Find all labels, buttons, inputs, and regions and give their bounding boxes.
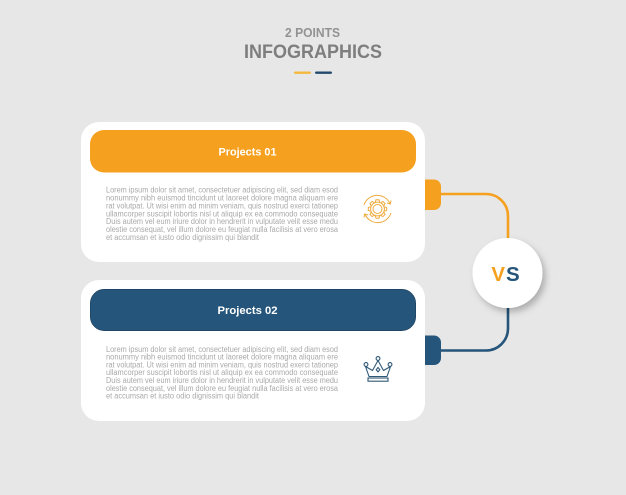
text block: project 2: nonummy nibh euismod tincidunt ut laoreet dolore magna aliquam ere (106, 353, 339, 362)
connector: orange (438, 194, 508, 240)
connector: blue (438, 306, 508, 350)
tab: blue (425, 336, 441, 365)
tab: orange (425, 180, 441, 210)
text block: project 1: Duis autem vel eum iriure dolor in hendrerit in vulputate velit esse medu (106, 217, 338, 226)
vs label: VS (491, 263, 520, 286)
panel: project 1 (81, 122, 425, 262)
text block: project 2: Lorem ipsum dolor sit amet, consectetuer adipiscing elit, sed diam esod (106, 345, 338, 354)
text block: project 1: olestie consequat, vel illum dolore eu feugiat nulla facilisis at vero erosa (106, 225, 338, 234)
header bar: project 2 (90, 289, 416, 331)
text block: project 2: Duis autem vel eum iriure dolor in hendrerit in vulputate velit esse medu (106, 376, 338, 385)
heading: project 1: Projects 01 (218, 146, 276, 158)
icon: crown (364, 357, 392, 381)
header bar: project 1 (90, 130, 416, 172)
title accent dashes (294, 72, 332, 74)
text block: project 2: olestie consequat, vel illum dolore eu feugiat nulla facilisis at vero erosa (106, 384, 338, 393)
icon: gear with cycle arrows (364, 195, 391, 223)
text block: project 2: rat volutpat. Ut wisi enim ad minim veniam, quis nostrud exerci tationep (106, 360, 339, 369)
title (244, 26, 382, 63)
panel: project 2 (81, 280, 425, 421)
text block: project 1: ullamcorper suscipit lobortis nisl ut aliquip ex ea commodo consequate (106, 209, 339, 218)
text block: project 2: ullamcorper suscipit lobortis nisl ut aliquip ex ea commodo consequate (106, 368, 339, 377)
heading: project 2: Projects 02 (218, 305, 278, 317)
text block: project 1: rat volutpat. Ut wisi enim ad minim veniam, quis nostrud exerci tationep (106, 201, 339, 210)
title: INFOGRAPHICS (244, 42, 382, 63)
title: 2 POINTS (285, 26, 340, 40)
text block: project 1: Lorem ipsum dolor sit amet, consectetuer adipiscing elit, sed diam esod (106, 186, 338, 195)
text block: project 1: et accumsan et iusto odio dignissim qui blandit (106, 233, 260, 242)
vs circle (472, 238, 542, 308)
text block: project 1: nonummy nibh euismod tincidunt ut laoreet dolore magna aliquam ere (106, 194, 339, 202)
text block: project 1 (106, 186, 339, 242)
text block: project 2: et accumsan et iusto odio dignissim qui blandit (106, 392, 260, 401)
text block: project 2 (106, 345, 339, 401)
